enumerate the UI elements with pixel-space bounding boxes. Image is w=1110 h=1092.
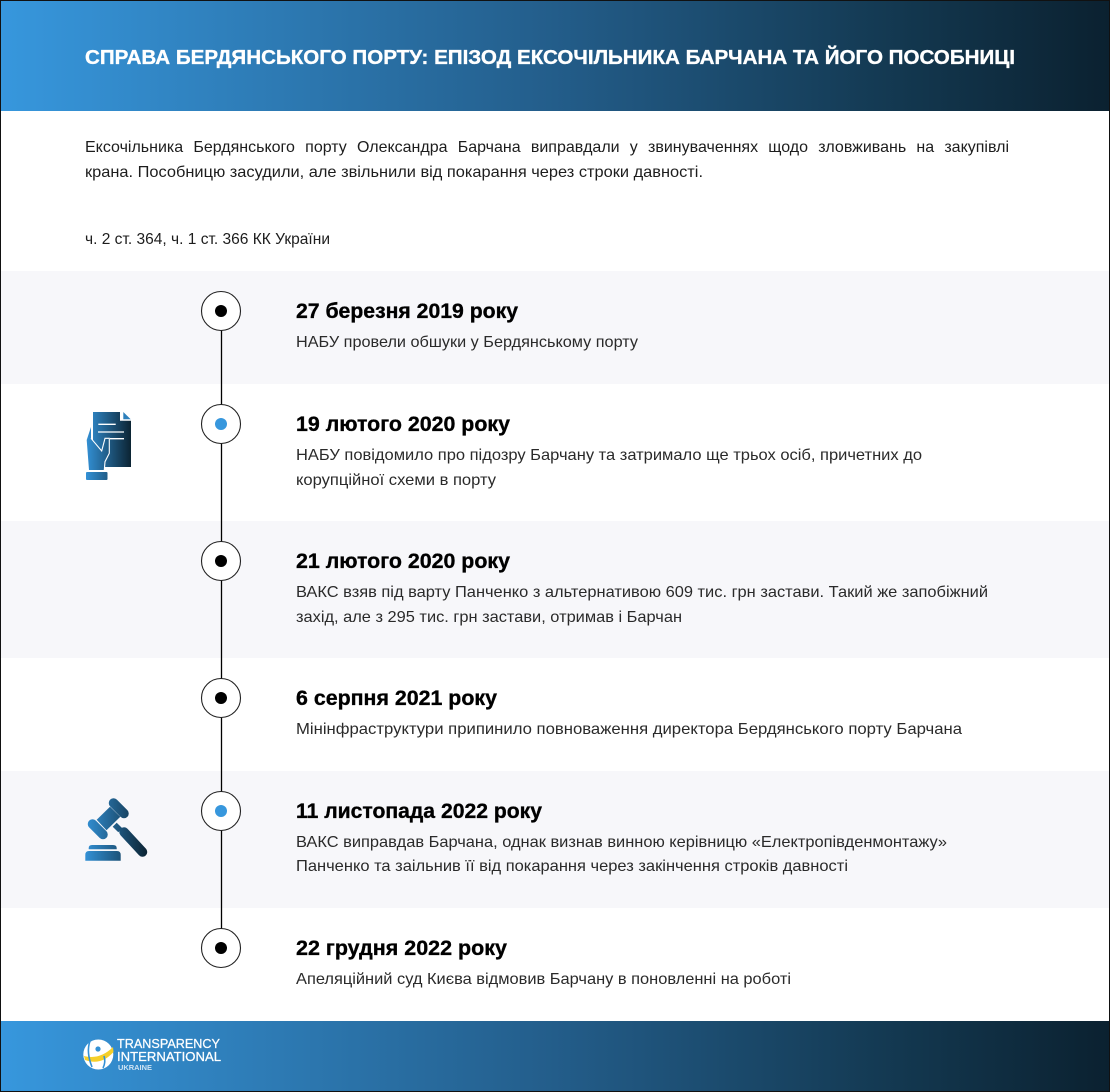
footer band [1, 1021, 1109, 1091]
icon: hand holding document [86, 412, 131, 480]
event 3: ВАКС взяв під варту Панченко з альтернативою 609 тис. грн застави. Такий же запобіжний [296, 584, 988, 601]
event 1: НАБУ провели обшуки у Бердянському порту [296, 334, 638, 351]
intro second line: крана. Пособницю засудили, але звільнили від покарання через строки давності. [85, 164, 703, 181]
marker 5 [202, 792, 240, 830]
event 6: 22 грудня 2022 року [296, 936, 507, 960]
footer logo [83, 1036, 221, 1072]
event 6: Апеляційний суд Києва відмовив Барчану в поновленні на роботі [296, 971, 791, 988]
marker 1 [202, 292, 240, 330]
row background 1 [1, 271, 1109, 384]
event 6 [296, 936, 791, 988]
event 5: Панченко та заільнив її від покарання через закінчення строків давності [296, 858, 848, 875]
marker 2 [202, 404, 240, 444]
event 4 [296, 686, 962, 738]
event 2: 19 лютого 2020 року [296, 412, 510, 436]
event 2: корупційної схеми в порту [296, 472, 496, 489]
event 4: Мінінфраструктури припинило повноваження директора Бердянського порту Барчана [296, 721, 962, 738]
event 4: 6 серпня 2021 року [296, 686, 497, 710]
event 3: 21 лютого 2020 року [296, 549, 510, 573]
marker 4 [202, 678, 240, 718]
marker 6 [202, 928, 240, 968]
event 5: 11 листопада 2022 року [296, 799, 542, 823]
event 5: ВАКС виправдав Барчана, однак визнав винною керівницю «Електропівденмонтажу» [296, 834, 947, 851]
footer logo: INTERNATIONAL [117, 1049, 221, 1064]
marker 3 [202, 542, 240, 580]
icon: gavel [85, 803, 142, 861]
row background 5 [1, 771, 1109, 908]
timeline axis [220, 311, 222, 948]
intro first line: Ексочільника Бердянського порту Олександра Барчана виправдали у звинуваченнях щодо зловживань на закупівлі [85, 139, 1009, 156]
event 2 [296, 412, 922, 489]
event 3: захід, але з 295 тис. грн застави, отримав і Барчан [296, 609, 682, 626]
event 2: НАБУ повідомило про підозру Барчану та затримало ще трьох осіб, причетних до [296, 447, 922, 464]
event 1 [296, 299, 638, 351]
event 5 [296, 799, 947, 875]
header band [1, 1, 1109, 111]
event 1: 27 березня 2019 року [296, 299, 518, 323]
footer logo: UKRAINE [118, 1065, 152, 1072]
event 3 [296, 549, 988, 626]
title: СПРАВА БЕРДЯНСЬКОГО ПОРТУ: ЕПІЗОД ЕКСОЧІЛЬНИКА БАРЧАНА ТА ЙОГО ПОСОБНИЦІ [85, 45, 1015, 69]
footer logo: TRANSPARENCY [117, 1036, 220, 1051]
legal reference: ч. 2 ст. 364, ч. 1 ст. 366 КК України [85, 231, 330, 248]
row background 3 [1, 521, 1109, 658]
